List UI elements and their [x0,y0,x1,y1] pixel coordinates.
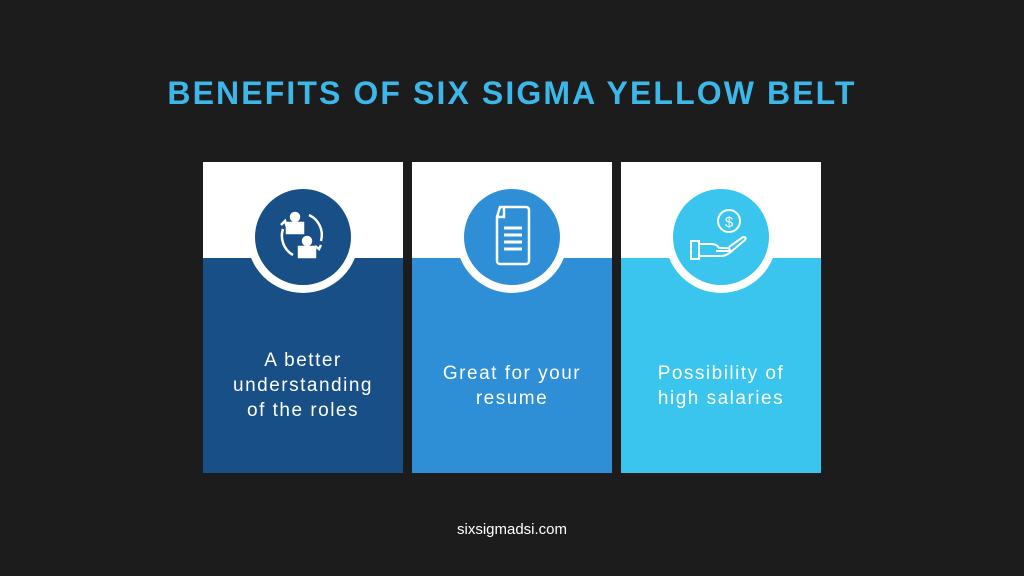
text [443,363,581,409]
icon: hand with coin: $ [725,214,734,231]
panel: roles [203,162,403,473]
icon: document [464,189,560,285]
text: resume [476,388,548,409]
text: understanding [233,375,373,396]
text: Possibility of [658,363,784,384]
text: of the roles [247,400,359,421]
title: BENEFITS OF SIX SIGMA YELLOW BELT [167,75,857,111]
icon: people exchange [255,189,351,285]
text: high salaries [658,388,784,409]
text [658,363,784,409]
icon: hand with coin [673,189,769,285]
panel: salaries [621,162,821,473]
panel: resume [412,162,612,473]
footer: sixsigmadsi.com [457,521,567,538]
text: A better [264,350,342,371]
text: Great for your [443,363,581,384]
text [233,350,373,421]
